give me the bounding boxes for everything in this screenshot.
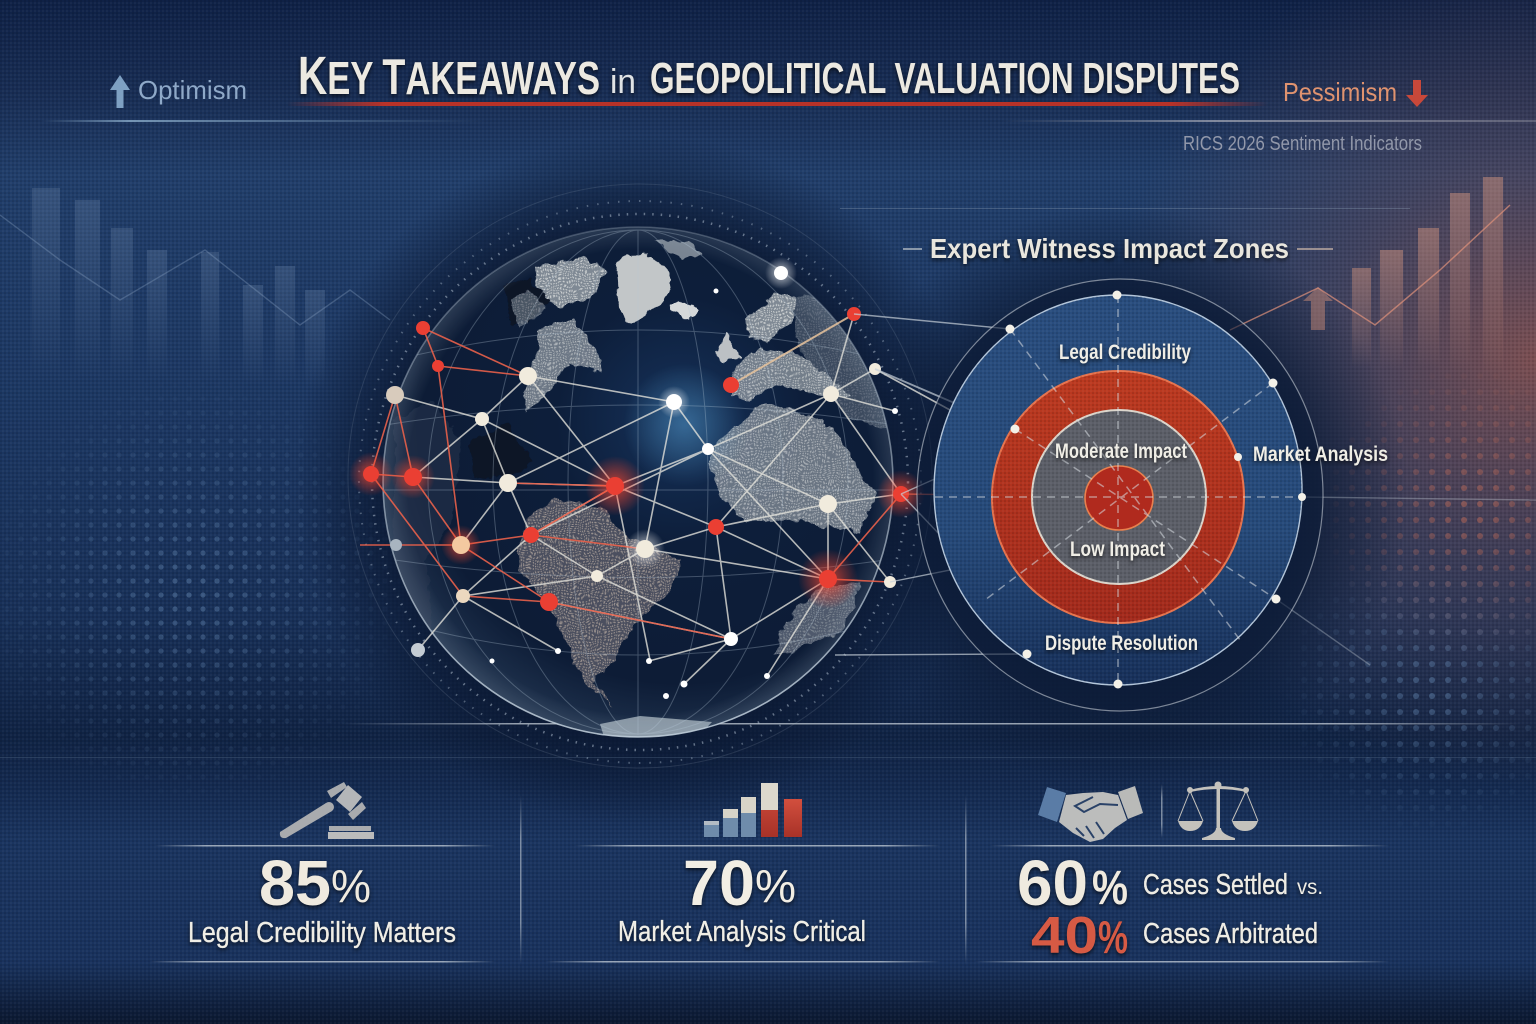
connector lines: globe to target xyxy=(835,314,1536,665)
zone labels: Market Analysis xyxy=(1253,443,1388,466)
value: 60 percent settled: 60 xyxy=(1017,847,1088,919)
value xyxy=(259,847,371,919)
icon: bar chart xyxy=(704,783,802,837)
impact zones target chart xyxy=(917,279,1388,711)
zone labels: Moderate Impact xyxy=(1055,440,1187,463)
value: 40 percent arbitrated: 40 xyxy=(1031,907,1098,965)
outer thin ring xyxy=(917,279,1323,711)
continents xyxy=(395,240,893,740)
icon: gavel xyxy=(280,782,374,839)
red centre xyxy=(1085,466,1153,530)
zone labels xyxy=(1045,341,1388,655)
red ring xyxy=(992,371,1244,623)
title: GEOPOLITICAL VALUATION DISPUTES xyxy=(650,54,1240,103)
grey ring xyxy=(1032,410,1206,584)
target nodes xyxy=(1006,290,1306,688)
sphere body xyxy=(383,227,893,737)
stat: settled vs arbitrated xyxy=(1017,782,1323,965)
title: KEY TAKEAWAYS xyxy=(298,46,600,106)
label: Market Analysis Critical xyxy=(618,916,866,948)
value xyxy=(683,847,796,919)
blue ring xyxy=(934,295,1302,685)
value: % xyxy=(331,860,371,912)
network nodes: red xyxy=(363,307,909,611)
stat: legal credibility xyxy=(188,782,456,949)
value: % xyxy=(755,860,796,912)
title underline xyxy=(287,102,1268,106)
zone labels: Low Impact xyxy=(1070,538,1165,561)
title xyxy=(298,46,1240,106)
heading: expert witness impact zones: Expert Witness Impact Zones xyxy=(930,233,1289,264)
icon: handshake xyxy=(1038,786,1143,842)
network links: red xyxy=(360,328,901,639)
value: 40 percent arbitrated: Cases Arbitrated xyxy=(1143,918,1318,950)
value: 40 percent arbitrated: % xyxy=(1098,911,1128,963)
subtitle: source: RICS 2026 Sentiment Indicators xyxy=(1183,133,1422,155)
label: Legal Credibility Matters xyxy=(188,917,456,949)
value: 60 percent settled: % xyxy=(1092,862,1128,915)
title: in xyxy=(610,63,636,101)
dotted orbit rings xyxy=(348,184,932,768)
central light xyxy=(623,363,747,487)
bottom dividers xyxy=(150,784,1390,965)
radial dashed lines xyxy=(935,295,1302,684)
icon: scales of justice xyxy=(1178,782,1258,840)
background bar chart: left optimism xyxy=(0,188,390,390)
optimism indicator: Optimism xyxy=(138,75,247,105)
zone labels: Dispute Resolution xyxy=(1045,632,1198,655)
value: 70 xyxy=(683,847,755,919)
value: 85 xyxy=(259,847,331,919)
value: 40 percent arbitrated xyxy=(1031,907,1318,965)
zone labels: Legal Credibility xyxy=(1059,341,1191,364)
stat: market analysis xyxy=(618,783,866,948)
pessimism indicator: Pessimism xyxy=(1283,77,1397,107)
value: 60 percent settled: Cases Settled xyxy=(1143,869,1288,901)
value: 60 percent settled: vs. xyxy=(1297,876,1323,899)
graticule xyxy=(383,230,895,735)
network glow xyxy=(349,257,925,609)
value: 60 percent settled xyxy=(1017,847,1323,919)
rim shading xyxy=(383,227,893,737)
network links: white xyxy=(395,314,950,684)
background bar chart: right pessimism xyxy=(1230,177,1510,377)
network link: orange to Europe xyxy=(731,314,854,385)
network nodes: cream xyxy=(386,266,898,699)
globe xyxy=(348,184,950,768)
